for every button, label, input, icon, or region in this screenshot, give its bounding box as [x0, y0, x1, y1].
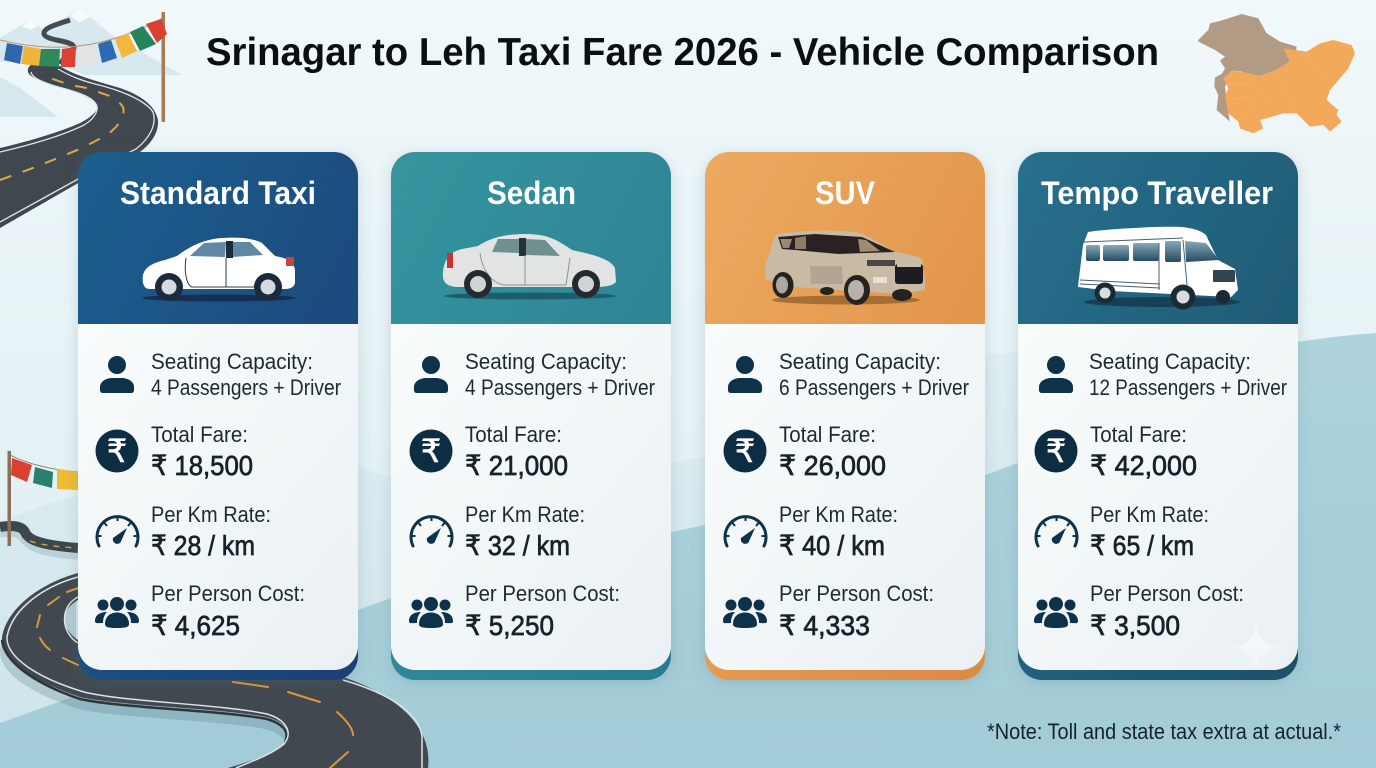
- per person row: Per Person Cost:: [779, 581, 934, 606]
- total fare row: Total Fare:: [151, 422, 248, 447]
- per person row: [723, 581, 934, 641]
- icon: faint sparkle: [1233, 624, 1279, 670]
- total fare row: ₹: [107, 433, 127, 469]
- per person row: [409, 581, 620, 641]
- per person row: ₹ 3,500: [1090, 610, 1180, 641]
- per person row: ₹ 4,625: [151, 610, 240, 641]
- total fare row: ₹: [1046, 433, 1066, 469]
- footnote: *Note: Toll and state tax extra at actual.*: [987, 719, 1341, 744]
- per km row: [411, 502, 585, 561]
- total fare row: [1034, 422, 1197, 481]
- total fare row: ₹ 42,000: [1090, 450, 1197, 481]
- total fare row: [96, 422, 253, 481]
- seating row: 12 Passengers + Driver: [1089, 375, 1287, 400]
- title: Srinagar to Leh Taxi Fare 2026 - Vehicle Comparison: [206, 31, 1159, 74]
- per person row: ₹ 5,250: [465, 610, 554, 641]
- icon: white tempo traveller van: [1078, 227, 1240, 310]
- seating row: 4 Passengers + Driver: [151, 375, 341, 400]
- seating row: [100, 349, 341, 400]
- total fare row: ₹ 18,500: [151, 450, 253, 481]
- per km row: ₹ 65 / km: [1090, 530, 1194, 561]
- per person row: Per Person Cost:: [151, 581, 305, 606]
- seating row: 4 Passengers + Driver: [465, 375, 655, 400]
- total fare row: Total Fare:: [1090, 422, 1187, 447]
- total fare row: Total Fare:: [465, 422, 562, 447]
- road: top-left winding road: [0, 20, 158, 228]
- per km row: Per Km Rate:: [465, 502, 585, 527]
- seating row: [1039, 349, 1287, 400]
- icon: white taxi car: [142, 238, 296, 302]
- heading: SUV: SUV: [815, 175, 876, 211]
- total fare row: ₹ 21,000: [465, 450, 568, 481]
- mountains top-left: [0, 9, 182, 117]
- map of Jammu Kashmir and Ladakh: [1198, 14, 1355, 133]
- total fare row: ₹: [735, 433, 755, 469]
- per person row: ₹ 4,333: [779, 610, 870, 641]
- heading: Sedan: Sedan: [487, 175, 576, 211]
- per km row: Per Km Rate:: [1090, 502, 1209, 527]
- per km row: [725, 502, 898, 561]
- seating row: Seating Capacity:: [151, 349, 313, 374]
- per person row: [1034, 581, 1244, 641]
- seating row: 6 Passengers + Driver: [779, 375, 969, 400]
- per km row: ₹ 32 / km: [465, 530, 570, 561]
- per person row: [95, 581, 305, 641]
- per km row: [97, 502, 271, 561]
- per km row: Per Km Rate:: [151, 502, 271, 527]
- panel: SUV: [705, 152, 985, 680]
- total fare row: ₹ 26,000: [779, 450, 886, 481]
- heading: Tempo Traveller: Tempo Traveller: [1041, 175, 1273, 211]
- total fare row: [410, 422, 568, 481]
- seating row: Seating Capacity:: [465, 349, 627, 374]
- prayer flags top: [0, 12, 167, 122]
- icon: silver sedan car: [443, 234, 616, 300]
- per km row: ₹ 40 / km: [779, 530, 885, 561]
- panel: Sedan: [391, 152, 671, 680]
- icon: beige SUV: [765, 231, 925, 305]
- per km row: Per Km Rate:: [779, 502, 898, 527]
- panel: Standard Taxi: [78, 152, 358, 680]
- seating row: Seating Capacity:: [779, 349, 941, 374]
- total fare row: Total Fare:: [779, 422, 876, 447]
- heading: Standard Taxi: Standard Taxi: [120, 175, 316, 211]
- seating row: [414, 349, 655, 400]
- seating row: Seating Capacity:: [1089, 349, 1251, 374]
- per person row: Per Person Cost:: [1090, 581, 1244, 606]
- per km row: ₹ 28 / km: [151, 530, 255, 561]
- total fare row: [724, 422, 886, 481]
- per km row: [1036, 502, 1209, 561]
- per person row: Per Person Cost:: [465, 581, 620, 606]
- prayer flags lower-left: [8, 451, 78, 546]
- total fare row: ₹: [421, 433, 441, 469]
- seating row: [728, 349, 969, 400]
- road: lower winding road: [0, 573, 428, 768]
- panel: Tempo Traveller: [1018, 152, 1298, 680]
- road: lower-left small road: [0, 526, 78, 554]
